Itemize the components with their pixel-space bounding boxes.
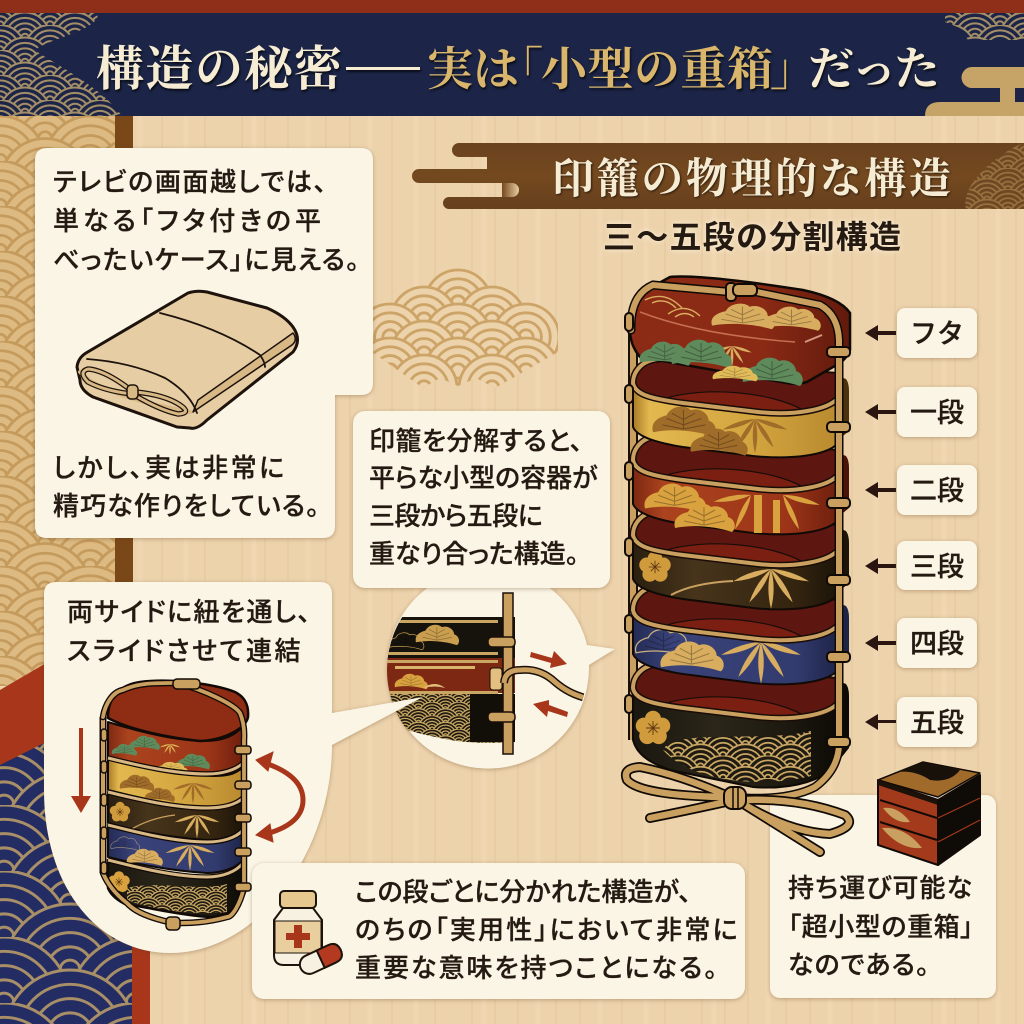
label: tier three <box>865 541 977 590</box>
panel: tv view <box>35 148 373 538</box>
panel: side cords <box>44 582 423 953</box>
panel: practicality: のちの「実用性」において非常に <box>355 915 740 945</box>
callout: cord detail <box>380 586 615 769</box>
label: tier four <box>865 618 977 668</box>
panel: dismantled description: 三段から五段に <box>369 501 542 531</box>
label: tier two <box>865 465 977 515</box>
text: tv view intro: テレビの画面越しでは、 <box>53 167 328 197</box>
title text: 構造の秘密 <box>96 43 344 96</box>
title text: 」 <box>770 44 816 95</box>
title banner <box>0 0 1024 116</box>
lid <box>108 681 248 741</box>
arrows: slide direction <box>530 651 568 717</box>
tier labels <box>865 308 977 747</box>
lid <box>630 277 850 386</box>
cord bow <box>626 767 849 852</box>
tier four <box>633 586 849 684</box>
panel: dismantled description: 印籠を分解すると、 <box>369 426 583 456</box>
label: tier three: 三段 <box>910 552 964 582</box>
tier one <box>633 359 849 457</box>
label: tier two: 二段 <box>910 476 964 506</box>
panel: portable: 持ち運び可能な <box>788 873 973 903</box>
text: tv view intro: べったいケース」に見える。 <box>53 245 360 275</box>
panel: portable: なのである。 <box>788 950 930 980</box>
label: tier one: 一段 <box>910 398 964 428</box>
label: tier four: 四段 <box>910 629 964 659</box>
subheading: 三〜五段の分割構造 <box>603 219 901 255</box>
left cord behind <box>628 320 638 740</box>
text: tv view intro: 単なる「フタ付きの平 <box>53 206 325 236</box>
text: tv view conclusion: 精巧な作りをしている。 <box>53 491 320 521</box>
panel: portable <box>770 762 996 998</box>
decorative wave motif <box>373 268 558 388</box>
panel: dismantled description: 平らな小型の容器が <box>369 463 598 493</box>
icon: stacked box <box>878 762 980 865</box>
panel: practicality <box>252 863 745 999</box>
panel: practicality: 重要な意味を持つことになる。 <box>355 953 719 983</box>
section heading band <box>412 143 1024 209</box>
panel: portable: 「超小型の重箱」 <box>788 912 974 942</box>
title text: 「 <box>497 44 543 95</box>
panel: practicality: この段ごとに分かれた構造が、 <box>355 877 691 907</box>
title text: だった <box>808 44 940 95</box>
label: tier five: 五段 <box>910 708 964 738</box>
title text <box>96 43 940 96</box>
arrow: curved double <box>256 752 303 842</box>
text: side cords: 両サイドに紐を通し、 <box>67 597 312 627</box>
left decorative strip <box>0 116 150 1024</box>
arrow: down <box>71 728 91 813</box>
section heading text: 印籠の物理的な構造 <box>552 156 951 203</box>
label: tier one <box>865 387 977 437</box>
tier two <box>633 436 849 534</box>
icon: medicine bottle <box>274 891 345 977</box>
panel: dismantled description <box>353 411 610 588</box>
panel: dismantled description: 重なり合った構造。 <box>369 539 579 569</box>
tier three <box>633 511 849 609</box>
illustration: inro exploded <box>625 277 850 852</box>
text: tv view conclusion: しかし、実は非常に <box>53 453 287 483</box>
title text: 小型の重箱 <box>541 44 773 95</box>
label: tier five <box>865 697 977 747</box>
label: lid: フタ <box>910 319 964 349</box>
illustration: small inro assembled <box>101 679 251 930</box>
text: side cords: スライドさせて連結 <box>67 636 303 666</box>
label: lid <box>865 308 977 358</box>
icon: flat pouch <box>77 291 298 428</box>
title text: 実は <box>427 44 519 95</box>
tier five <box>633 664 849 788</box>
right cord and knots <box>631 285 839 798</box>
